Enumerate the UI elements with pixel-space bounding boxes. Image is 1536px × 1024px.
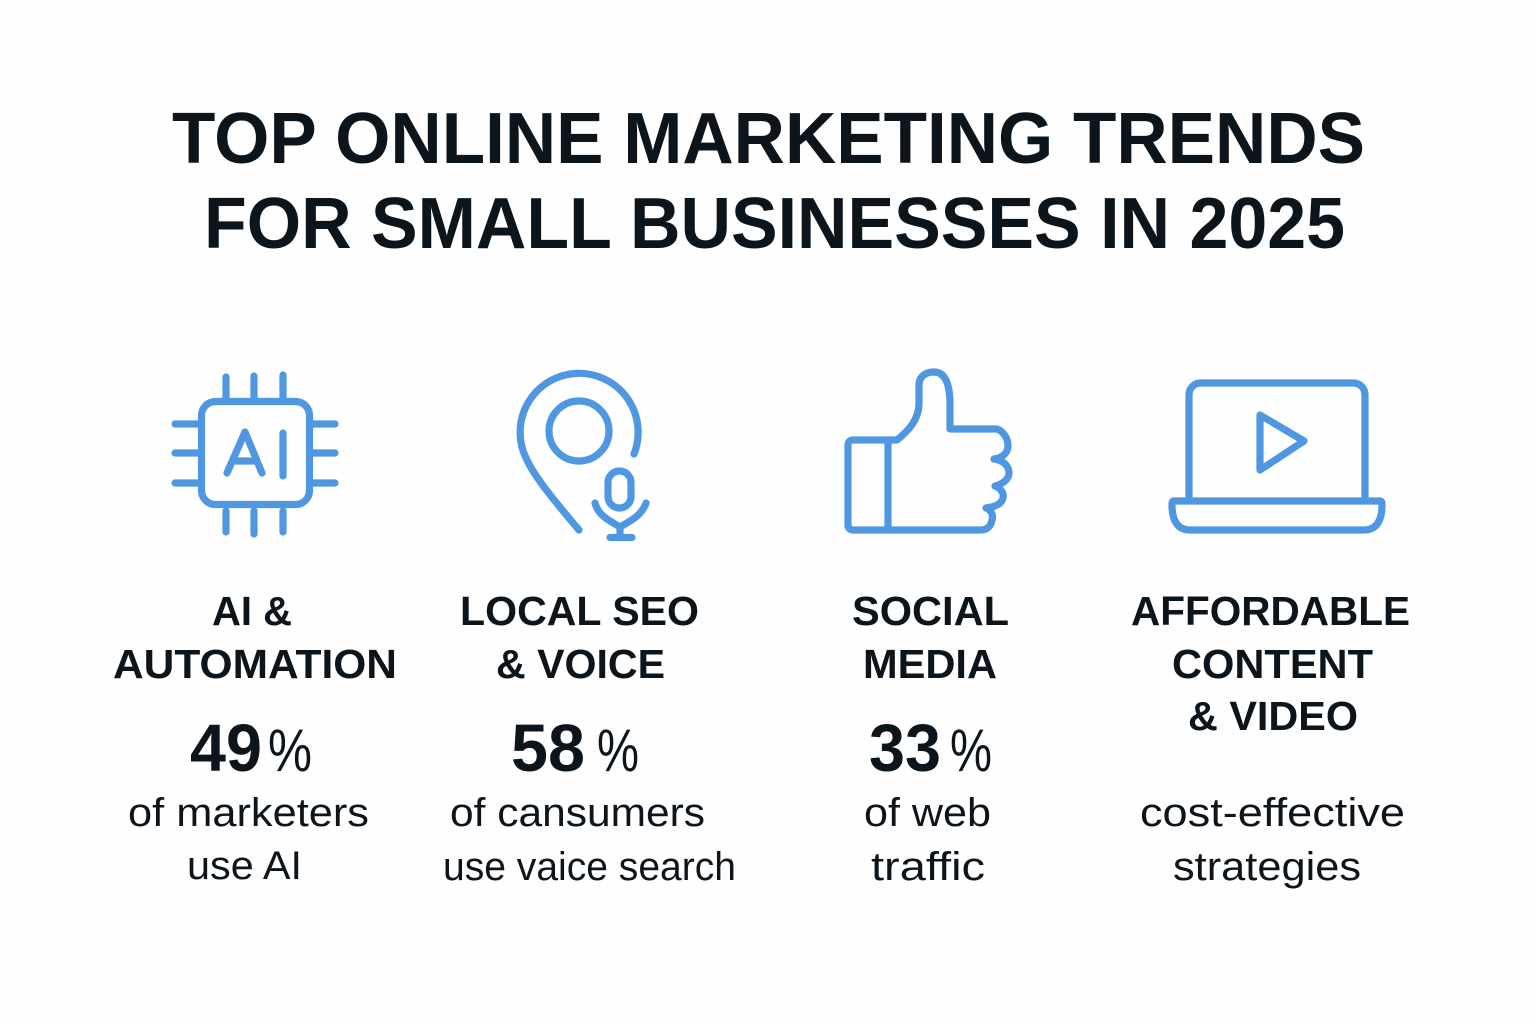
description: of web traffic: of web <box>864 791 991 835</box>
heading: Social Media: MEDIA <box>863 641 997 687</box>
panel: social media <box>848 372 1009 889</box>
icon: thumbs up <box>848 372 1009 530</box>
icon: laptop with play button <box>1172 383 1382 530</box>
panel: local SEO & voice <box>443 373 736 889</box>
description: of marketers use AI: use AI <box>187 844 302 888</box>
description: cost-effective strategies <box>1140 791 1405 889</box>
heading: AI & Automation <box>113 588 397 687</box>
statistic: 49% <box>190 711 312 786</box>
description: of marketers use AI <box>128 791 369 888</box>
heading: AI & Automation: AI & <box>212 588 292 634</box>
heading: Social Media <box>852 588 1009 687</box>
description: of consumers use voice search: of cansumers <box>450 791 705 835</box>
title <box>172 99 1365 264</box>
heading: Social Media: SOCIAL <box>852 588 1009 634</box>
heading: Local SEO & Voice: & VOICE <box>496 641 665 687</box>
description: of marketers use AI: of marketers <box>128 791 369 835</box>
heading: Affordable Content & Video: AFFORDABLE <box>1131 588 1410 634</box>
heading: Affordable Content & Video: CONTENT <box>1172 641 1373 687</box>
title: TOP ONLINE MARKETING TRENDS <box>172 99 1365 179</box>
title: FOR SMALL BUSINESSES IN 2025 <box>204 184 1345 264</box>
description: of consumers use voice search: use vaice search <box>443 845 736 889</box>
description: cost-effective strategies: cost-effective <box>1140 791 1405 835</box>
statistic: 58% <box>511 711 639 786</box>
description: of consumers use voice search <box>443 791 736 889</box>
statistic: 33%: % <box>950 717 992 784</box>
statistic: 49%: % <box>268 717 312 784</box>
statistic: 33% <box>869 711 992 786</box>
heading: Local SEO & Voice <box>460 588 699 687</box>
heading: Local SEO & Voice: LOCAL SEO <box>460 588 699 634</box>
heading: Affordable Content & Video: & VIDEO <box>1188 693 1358 739</box>
description: of web traffic <box>864 791 991 889</box>
icon: map pin with microphone <box>520 373 646 538</box>
statistic: 49%: 49 <box>190 711 262 786</box>
description: of web traffic: traffic <box>871 845 985 889</box>
panel: affordable content & video <box>1131 383 1410 889</box>
statistic: 58%: % <box>597 717 639 784</box>
statistic: 33%: 33 <box>869 711 941 786</box>
heading: AI & Automation: AUTOMATION <box>113 641 397 687</box>
icon: AI chip <box>175 375 335 534</box>
panel: AI & automation <box>113 375 397 888</box>
statistic: 58%: 58 <box>511 711 585 786</box>
heading: Affordable Content & Video <box>1131 588 1410 739</box>
description: cost-effective strategies: strategies <box>1173 845 1361 889</box>
